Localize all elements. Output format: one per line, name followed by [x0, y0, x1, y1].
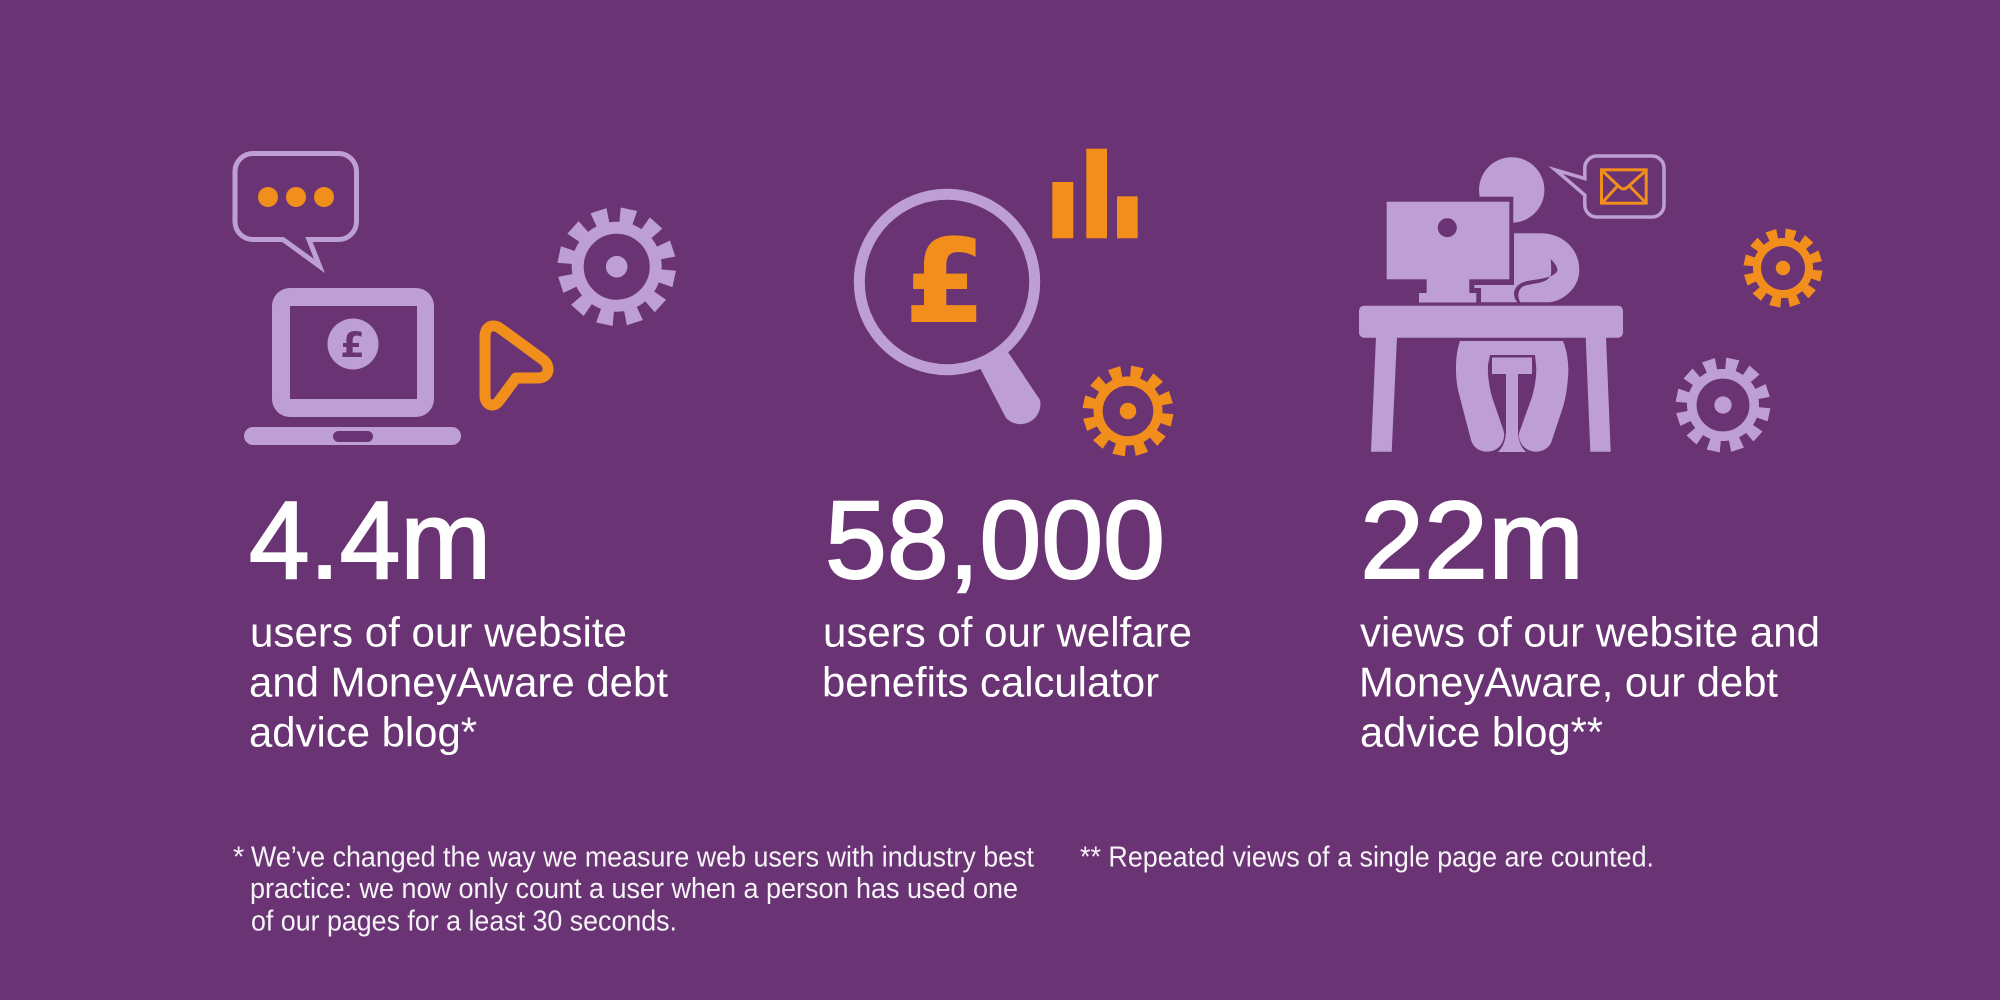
footnote: web user measurement: [233, 842, 1034, 938]
caption: calculator users: [822, 609, 1192, 706]
icon: speech bubble with dots: [235, 154, 356, 266]
icon: laptop with pound coin: [244, 288, 461, 445]
panel: website users: [235, 154, 679, 756]
statistic: 22m: 22m: [1360, 479, 1584, 602]
caption: page views: advice blog**: [1360, 709, 1603, 756]
footnote: repeated views: ** Repeated views of a single page are counted.: [1080, 842, 1654, 874]
icon: bar chart: [1052, 149, 1138, 238]
caption: page views: [1359, 609, 1820, 756]
footnote: web user measurement: practice: we now only count a user when a person has used one: [250, 873, 1018, 905]
caption: website users: and MoneyAware debt: [249, 659, 668, 706]
icon: magnifying glass with pound sign: £: [905, 215, 985, 348]
icon: orange gear: [1742, 227, 1824, 309]
icon: person at desk with computer: [1359, 157, 1623, 452]
icon: cursor arrow: [485, 326, 548, 405]
caption: website users: users of our website: [250, 609, 627, 656]
caption: calculator users: benefits calculator: [822, 659, 1159, 706]
icon: orange gear: [1080, 363, 1176, 459]
footnote: web user measurement: We’ve changed the way we measure web users with industry best: [251, 842, 1034, 874]
panel: calculator users: [822, 149, 1192, 706]
caption: calculator users: users of our welfare: [823, 609, 1192, 656]
caption: page views: MoneyAware, our debt: [1359, 659, 1778, 706]
footnote: web user measurement: of our pages for a least 30 seconds.: [251, 906, 677, 938]
icon: magnifying glass with pound sign: [859, 194, 1040, 424]
icon: speech bubble with envelope: [1556, 156, 1664, 217]
caption: page views: views of our website and: [1360, 609, 1820, 656]
caption: website users: advice blog*: [249, 709, 477, 756]
panel: page views: [1359, 156, 1824, 756]
icon: laptop with pound coin: £: [340, 326, 365, 366]
caption: website users: [249, 609, 668, 756]
footnote: web user measurement: *: [233, 842, 244, 874]
statistic: 58,000: 58,000: [825, 479, 1165, 602]
icon: lilac gear: [1673, 355, 1773, 455]
statistic: 4.4m: 4.4m: [249, 479, 491, 602]
icon: lilac gear: [555, 205, 679, 329]
